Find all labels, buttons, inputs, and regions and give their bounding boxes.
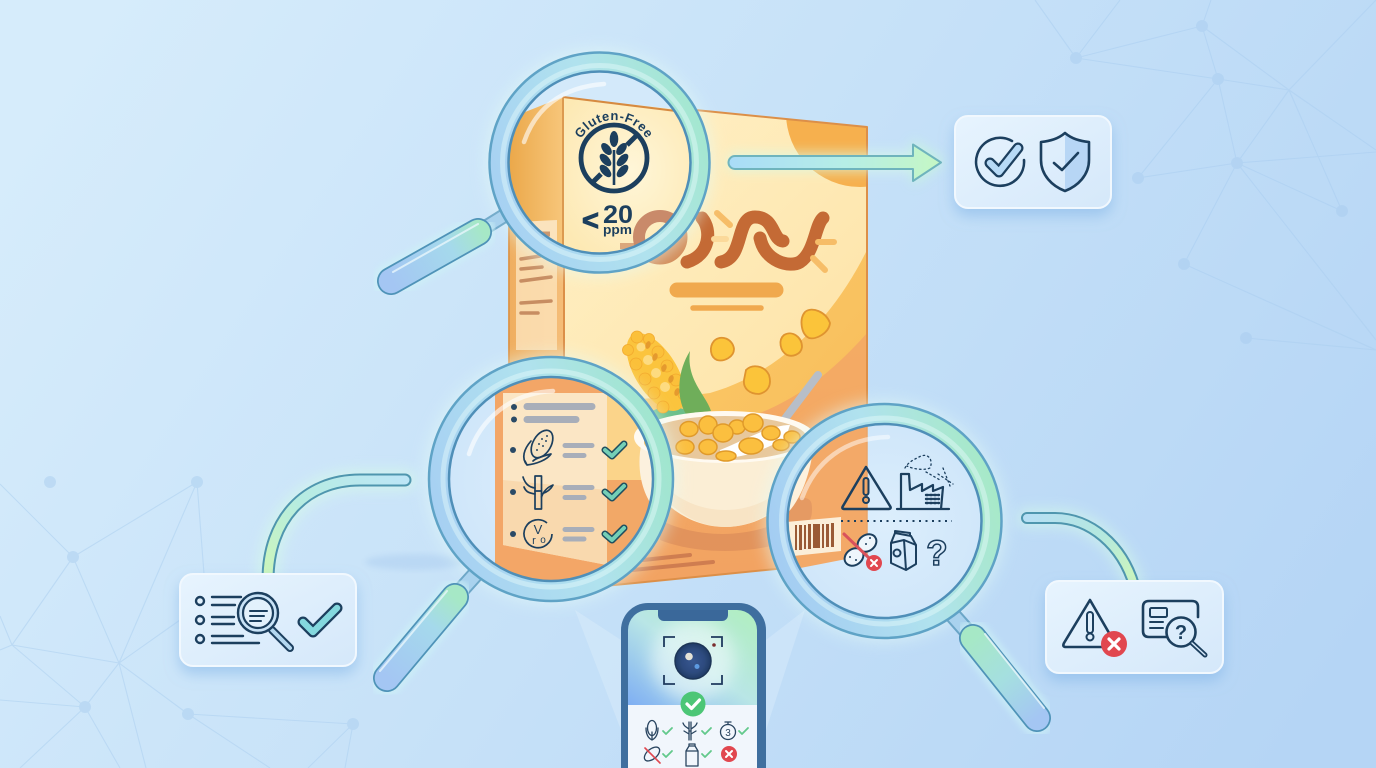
gluten-free icon [576,113,651,194]
spoon handle [778,375,818,428]
red fail badge [721,746,737,762]
card: verified [955,116,1111,208]
camera lens and scan frame [664,637,722,684]
magnifier: gluten-free lens [377,51,718,295]
status: pass badge [680,692,706,716]
limit text: < [582,205,599,237]
limit text: ppm [603,222,632,237]
connector: warning lens to warning card [1027,518,1134,585]
limit text [582,201,633,237]
cereal bowl [635,411,815,527]
gluten-free icon: Gluten-Free [576,113,651,138]
magnifier handle [950,612,1044,718]
network pattern: top right [1035,0,1376,350]
icon: list [196,597,259,643]
cane [683,722,697,740]
smartphone scanner [621,603,766,768]
cereal box [508,109,868,586]
icon: label query magnifier: ? [1175,622,1187,644]
light beams from phone [575,610,805,730]
icon: corn [524,427,557,465]
icon: warning triangle [1063,600,1127,657]
magnifier rim [768,404,1002,638]
cereal pieces [676,414,800,461]
magnifier: allergen lens [764,401,1044,718]
check marks [605,444,624,540]
icon: circled symbol: V [534,522,543,537]
icon: factory [897,455,953,509]
limit text: 20 [603,201,633,229]
lens contents [510,73,690,252]
magnifier handle [391,212,510,281]
icon: peanut crossed out [841,531,882,571]
card: ingredient list review [180,574,356,666]
ingredient results grid [642,720,736,766]
logo rays and title bars [677,213,834,308]
box front face [565,111,866,584]
timer: 3 [725,728,731,739]
corn [646,720,658,740]
magnifier rim [429,357,673,601]
card: warnings [1046,581,1223,673]
icon: shield [1041,133,1089,191]
icon: sugar cane [523,476,553,509]
box logo squiggle [639,216,823,264]
icon: label query magnifier [1143,601,1205,655]
magnifier rim [490,52,710,272]
icon: circled symbol: o [540,535,546,546]
magnifier: ingredients lens [380,354,716,678]
icon: question mark: ? [926,534,948,573]
corn cob with leaves [615,324,711,440]
icon: warning triangle [842,467,891,509]
phone screen [628,605,757,768]
loose corn kernels [711,310,830,394]
milk carton [686,744,698,766]
icon: circled symbol: r [532,535,536,547]
icon: milk carton [891,531,916,570]
connector: ingredient lens to list card [268,480,405,580]
arrow to verified card [728,140,945,185]
magnifier handle [380,567,482,678]
barcode [786,517,841,556]
small green checks [663,728,748,757]
icon: magnifier [238,593,290,648]
peanut struck [642,744,662,764]
icon: check mark [303,608,337,632]
icon: check circle [976,138,1024,186]
icon: circled symbol [524,520,552,548]
network pattern: bottom left [0,476,359,768]
ingredient list [510,404,624,548]
box side panel [509,97,564,590]
box bottom text lines [633,555,713,570]
dotted divider [841,520,952,522]
lens contents [788,426,949,605]
lens contents [450,378,652,580]
shadow under box [365,554,465,570]
